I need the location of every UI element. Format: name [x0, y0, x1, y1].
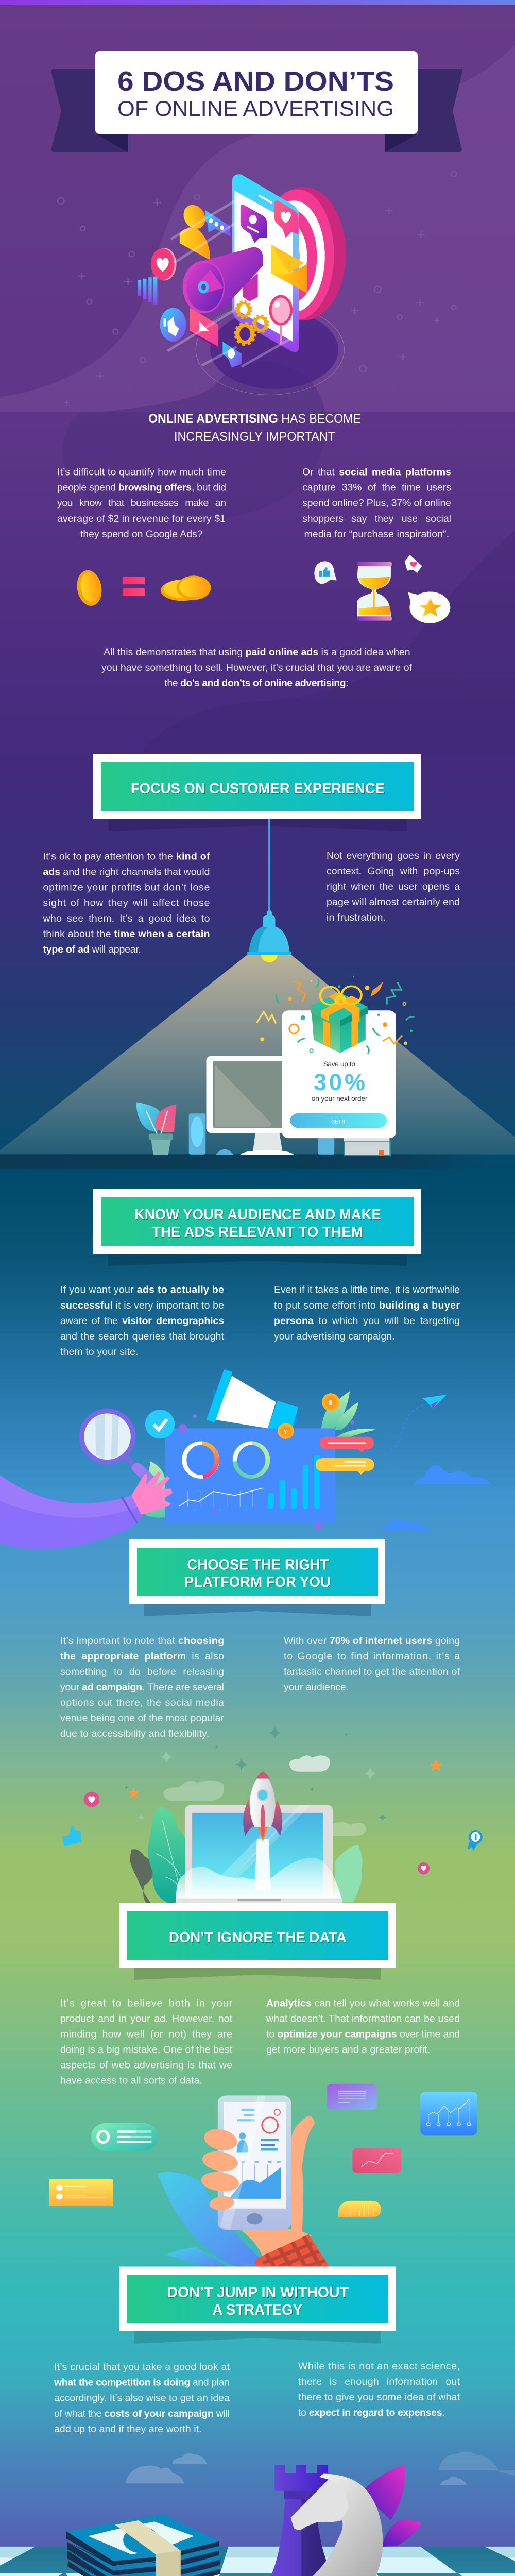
clouds	[381, 1465, 491, 1530]
line chart	[179, 1488, 263, 1513]
coin symbols	[284, 1399, 333, 1435]
laptop	[176, 1805, 342, 1903]
text block: intro left	[57, 466, 226, 540]
heading: focus on customer experience	[93, 754, 421, 831]
heading: know your audience	[93, 1189, 421, 1266]
text block: data left: aspects of web advertising is that we	[60, 2059, 232, 2071]
heading: know your audience: KNOW YOUR AUDIENCE AND MAKE	[134, 1207, 381, 1223]
text block: summary: the do’s and don’ts of online advertising:	[165, 677, 348, 689]
text block: data left: It’s great to believe both in your	[60, 1997, 233, 2009]
card: pink trend	[352, 2148, 401, 2173]
text block: platform left: due to accessibility and flexibility.	[60, 1728, 209, 1739]
plaid cuff	[255, 2234, 330, 2266]
heading: choose the right platform: CHOOSE THE RIGHT	[187, 1556, 329, 1573]
text block: platform left: venue being one of the most popular	[60, 1713, 225, 1724]
text block: intro right	[302, 466, 451, 540]
heading: don't jump in without a strategy: A STRATEGY	[213, 2302, 302, 2318]
icon: profile bubble	[241, 205, 267, 243]
text block: audience left: aware of the visitor demographics	[60, 1315, 224, 1327]
text block: intro right: shoppers say they use social	[302, 513, 451, 524]
confetti	[257, 979, 415, 1054]
text block: audience right: your advertising campaign.	[274, 1331, 395, 1342]
text block: strategy left: accordingly. It’s also wise to get an idea	[54, 2393, 230, 2404]
text block: platform left: options out there, the social media	[60, 1697, 224, 1708]
heading: choose the right platform: PLATFORM FOR YOU	[184, 1574, 331, 1590]
text block: intro right: Or that social media platforms	[302, 466, 451, 478]
speaker left	[189, 1113, 205, 1155]
icon: heart badge	[151, 248, 176, 280]
paper plane	[385, 1395, 447, 1452]
title text	[117, 66, 394, 121]
text block: summary	[101, 647, 413, 689]
text block: customer experience left: type of ad will appear.	[43, 944, 141, 955]
text block: intro right: media for “purchase inspiration”.	[304, 529, 449, 540]
ribbon right	[385, 69, 462, 152]
text block: customer experience left: think about the time when a certain	[43, 928, 210, 940]
heading: don't ignore the data	[119, 1903, 396, 1980]
megaphone	[207, 1369, 298, 1428]
ground shadow	[196, 304, 344, 395]
button	[290, 1113, 387, 1128]
speaker right	[318, 1137, 334, 1155]
icon: location bubble	[222, 342, 242, 367]
popup text: 30%	[314, 1069, 365, 1095]
clouds	[126, 2452, 515, 2485]
stars	[128, 1759, 442, 1799]
text block: data left	[60, 1997, 233, 2086]
palm	[242, 2116, 315, 2258]
text block: data right: to optimize your campaigns over time and	[266, 2029, 460, 2040]
icons: hearts	[84, 1792, 430, 1874]
text block: strategy right: While this is not an exact science,	[298, 2361, 460, 2372]
text block: customer experience right: Not everything goes in every	[327, 850, 460, 861]
text block: customer experience left: ads and the right channels that would	[43, 867, 210, 878]
dashboard panel	[165, 1428, 335, 1523]
text block: data right	[266, 1997, 460, 2056]
popup text: GET IT	[331, 1119, 346, 1125]
gift box	[311, 986, 368, 1053]
text block: strategy left	[54, 2362, 230, 2435]
card: small yellow bars	[338, 2201, 381, 2217]
icon: gears	[235, 301, 268, 345]
plant	[136, 1102, 176, 1155]
blue leaves	[158, 2172, 263, 2266]
text block: data right: what doesn’t. That information can be used	[266, 2013, 460, 2025]
text block: platform right: With over 70% of internet users going	[284, 1635, 460, 1647]
illustration: analytics dashboard with magnifier	[0, 1369, 491, 1549]
text block: audience right: to put some effort into building a buyer	[274, 1300, 460, 1311]
text block: customer experience right: in frustration.	[327, 912, 386, 923]
text block: customer experience left: optimize your profits but don’t lose	[43, 882, 210, 893]
mouse	[216, 1149, 233, 1155]
text block: audience right: Even if it takes a little time, it is worthwhile	[274, 1284, 460, 1296]
text block: customer experience left: It’s ok to pay attention to the kind of	[43, 851, 210, 862]
text block: platform left: your ad campaign. There are several	[60, 1682, 224, 1693]
text block: audience left: successful it is very important to be	[60, 1300, 224, 1311]
text block: summary: you have something to sell. However, it’s crucial that you are aware of	[101, 662, 413, 673]
fingers	[199, 2125, 241, 2212]
phone	[218, 2095, 291, 2230]
background blobs: intro	[62, 412, 515, 754]
plants	[130, 1807, 363, 1903]
text block: audience right	[274, 1284, 460, 1342]
icon: thumbs up	[62, 1825, 81, 1846]
text block: data left: doing is a big mistake. One of the best	[60, 2044, 233, 2056]
background blobs: hero	[0, 45, 515, 412]
card: purple text	[327, 2084, 377, 2110]
illustration: rocket launching from laptop	[62, 1726, 483, 1903]
text block: audience left	[60, 1284, 225, 1358]
text block: strategy right: to expect in regard to expenses.	[298, 2407, 445, 2418]
phone	[232, 174, 299, 352]
text block: intro left: they spend on Google Ads?	[80, 529, 203, 540]
text block: audience left: If you want your ads to actually be	[60, 1284, 224, 1296]
icons: one coin equals two coins	[75, 569, 211, 607]
title text: 6 DOS AND DON’TS	[117, 66, 394, 97]
light cone	[0, 955, 515, 1155]
icons: hourglass with social bubbles	[314, 555, 450, 623]
ribbon left	[51, 69, 128, 152]
icon: person	[180, 203, 210, 260]
bubble: star	[408, 591, 450, 623]
title text: OF ONLINE ADVERTISING	[117, 96, 394, 121]
text block: customer experience right: page will almost certainly end	[327, 896, 460, 908]
text block: platform right	[284, 1635, 460, 1693]
title card	[95, 51, 418, 134]
title banner	[51, 51, 462, 152]
heading: don't jump in without a strategy: DON’T JUMP IN WITHOUT	[167, 2284, 349, 2301]
section heading: online advertising	[148, 412, 361, 444]
icon: video	[190, 308, 218, 349]
text block: platform right: fantastic channel to get the attention of	[284, 1666, 460, 1677]
text block: intro left: people spend browsing offers, but did	[57, 482, 226, 494]
popup text: Save up to	[323, 1060, 355, 1068]
sparkles	[138, 1751, 376, 1821]
text block: platform left: the appropriate platform is also	[60, 1651, 224, 1662]
text block: summary: All this demonstrates that using paid online ads is a good idea when	[104, 647, 410, 658]
check badge	[145, 1410, 175, 1438]
icon: chat bubble	[205, 210, 231, 236]
message bubbles	[316, 1437, 374, 1475]
text block: customer experience left: who see them. It’s a good idea to	[42, 913, 210, 924]
card: green ring chart	[91, 2123, 158, 2151]
coin symbols: $	[329, 1399, 333, 1406]
bubble: heart	[405, 555, 422, 573]
popup text: on your next order	[312, 1094, 368, 1103]
icon: signal bars	[138, 277, 157, 305]
icon: heart bubble	[274, 200, 299, 238]
icon: like badge	[160, 308, 186, 342]
hero illustration: phone, megaphone and target	[58, 172, 456, 405]
clouds	[163, 1755, 366, 1836]
lamp	[247, 819, 291, 962]
card: yellow list	[49, 2179, 113, 2206]
text block: platform left: It’s important to note that choosing	[60, 1635, 224, 1647]
text block: strategy left: of what the costs of your campaign will	[54, 2408, 230, 2419]
popup card	[282, 1010, 396, 1138]
section heading: online advertising: ONLINE ADVERTISING HAS BECOME	[148, 412, 361, 426]
text block: intro right: spend online? Plus, 37% of online	[302, 498, 451, 509]
text block: strategy right: there to give you some idea of what	[298, 2392, 460, 2403]
text block: customer experience right	[327, 850, 460, 923]
monitor	[207, 1056, 305, 1155]
illustration: desk under hanging lamp	[0, 819, 515, 1169]
text block: strategy left: add up to and if they are worth it.	[54, 2424, 202, 2435]
leaves	[143, 1391, 376, 1518]
text block: platform left: something to do before releasing	[60, 1666, 224, 1677]
section heading: online advertising: INCREASINGLY IMPORTANT	[174, 430, 335, 444]
heading: don't jump in without a strategy	[119, 2267, 396, 2344]
icon: magnifier	[269, 295, 293, 344]
text block: strategy right: there is enough information out	[298, 2376, 460, 2387]
leaves behind chess pieces	[365, 2465, 421, 2547]
money stack	[66, 2514, 221, 2576]
text block: data left: have access to all sorts of data.	[60, 2075, 202, 2086]
rocket	[243, 1771, 282, 1842]
text block: intro right: capture 33% of the time users	[302, 482, 451, 494]
heading: focus on customer experience: FOCUS ON CUSTOMER EXPERIENCE	[131, 781, 385, 797]
text block: platform left	[60, 1635, 225, 1739]
icon: envelope	[271, 244, 307, 293]
text block: platform right: to Google to find information, it’s a	[284, 1651, 460, 1662]
bubble: thumb	[314, 561, 337, 584]
coin symbols: ¥	[284, 1429, 287, 1435]
megaphone	[183, 247, 263, 313]
text block: data right: get more buyers and a greater profit.	[266, 2044, 430, 2056]
text block: customer experience right: right when the user opens a	[327, 881, 460, 892]
magnifier	[79, 1409, 135, 1464]
light streaks	[167, 201, 293, 367]
text block: customer experience right: context. Going with pop-ups	[327, 866, 460, 877]
hourglass	[357, 562, 392, 621]
board	[0, 2547, 515, 2576]
coins	[278, 1393, 339, 1439]
dots	[179, 1414, 354, 1530]
text block: audience right: persona to which you will be targeting	[274, 1315, 460, 1327]
text block: data left: minding how well (or not) they are	[60, 2029, 232, 2040]
illustration: chess board with money, rook and knight	[0, 2452, 515, 2576]
text block: strategy right	[298, 2361, 460, 2418]
arm and hand	[0, 1458, 173, 1549]
popup text	[312, 1060, 368, 1125]
text block: intro left: average of $2 in revenue for every $1	[57, 513, 226, 524]
text block: audience left: and the search queries that brought	[60, 1331, 225, 1342]
card: blue line chart	[420, 2092, 477, 2135]
heading: don't ignore the data: DON’T IGNORE THE DATA	[169, 1929, 347, 1946]
heading: know your audience: THE ADS RELEVANT TO THEM	[152, 1224, 363, 1241]
icon: first place ribbon	[468, 1830, 483, 1851]
desk	[0, 1154, 493, 1169]
text block: data right: Analytics can tell you what works well and	[266, 1997, 460, 2009]
rook	[269, 2465, 332, 2576]
text block: strategy left: what the competition is doing and plan	[54, 2377, 230, 2388]
heading: choose the right platform	[129, 1539, 385, 1616]
text block: customer experience left: sight of how they will affect those	[43, 897, 210, 909]
text block: intro left: It’s difficult to quantify how much time	[57, 466, 226, 478]
illustration: hand holding phone with data cards	[49, 2084, 477, 2266]
text block: platform right: your audience.	[284, 1682, 349, 1693]
decorative marks	[58, 172, 456, 405]
top colour bar	[0, 0, 515, 5]
books	[344, 1137, 390, 1156]
text block: data left: product and in your ad. However, not	[60, 2013, 233, 2025]
ribbon folds	[95, 134, 418, 152]
knight	[290, 2474, 383, 2576]
target	[261, 187, 346, 320]
text block: intro left: you know that businesses make an	[57, 498, 226, 509]
text block: customer experience left	[42, 851, 210, 955]
text block: audience left: them to your site.	[60, 1346, 138, 1358]
text block: strategy left: It’s crucial that you take a good look at	[54, 2362, 230, 2373]
ring charts	[184, 1443, 268, 1477]
bar chart	[268, 1454, 320, 1509]
